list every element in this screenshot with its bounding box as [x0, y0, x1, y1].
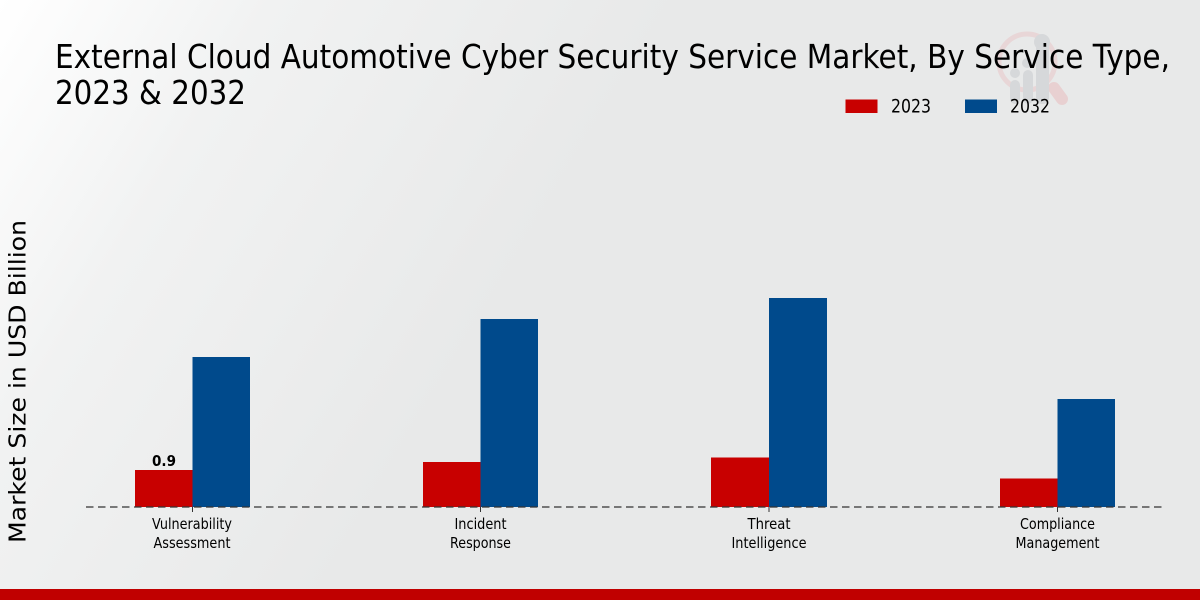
x axis labels: Intelligence	[732, 534, 806, 552]
x axis labels: Compliance	[1020, 515, 1095, 533]
watermark logo	[999, 34, 1062, 104]
y axis label: Market Size in USD Billion	[6, 220, 32, 543]
group: Vulnerability Assessment	[135, 357, 250, 507]
x axis labels	[152, 515, 1100, 552]
group: Compliance Management	[1000, 399, 1115, 507]
footer bar	[0, 589, 1200, 600]
legend	[846, 96, 1050, 118]
x axis labels: Assessment	[154, 534, 230, 552]
legend item: 2032: 2032	[1010, 96, 1050, 118]
legend item: 2023	[846, 96, 931, 118]
group: Vulnerability Assessment: 0.9	[152, 452, 176, 470]
x axis labels: Threat	[747, 515, 790, 533]
bar chart	[86, 298, 1164, 512]
title: 2023 & 2032	[55, 73, 246, 112]
x axis labels: Vulnerability	[152, 515, 232, 533]
group: Incident Response	[423, 319, 538, 507]
x axis labels: Response	[450, 534, 511, 552]
legend item: 2023: 2023	[891, 96, 931, 118]
group: Threat Intelligence	[711, 298, 827, 507]
title	[55, 37, 1170, 112]
x axis labels: Incident	[454, 515, 506, 533]
legend item: 2032	[965, 96, 1050, 118]
x axis labels: Management	[1016, 534, 1100, 552]
